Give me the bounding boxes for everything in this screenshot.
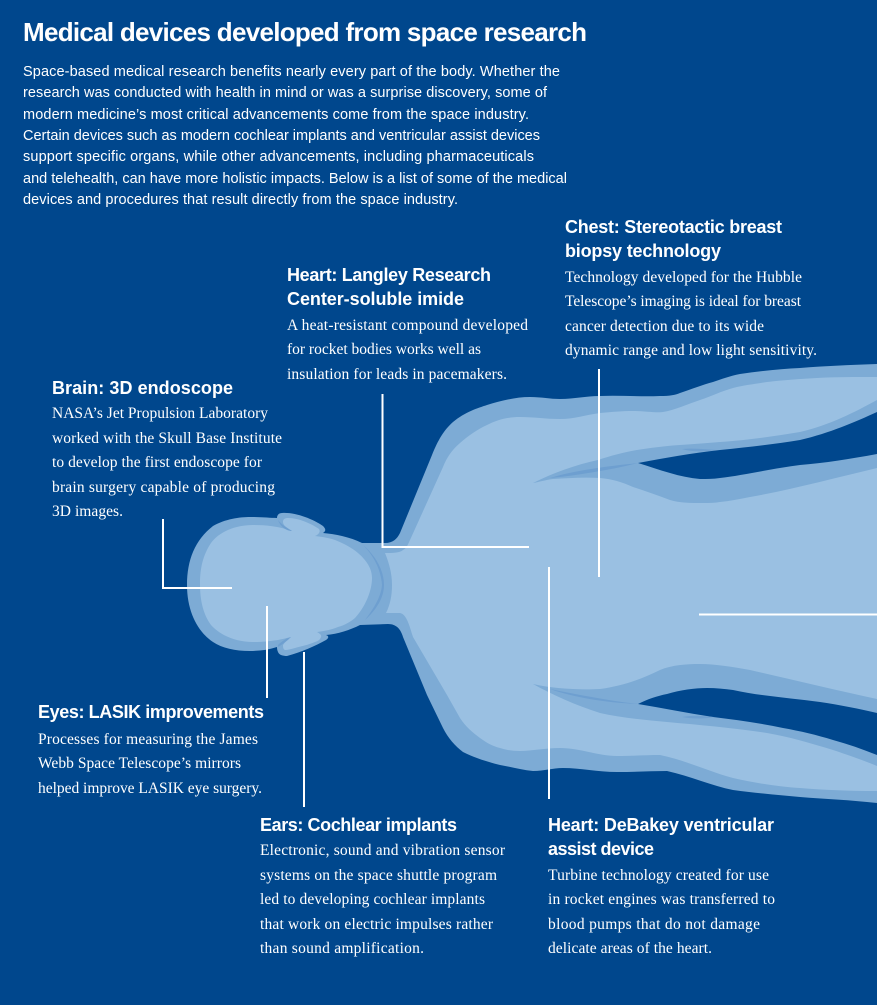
lower arm dark gap — [638, 688, 877, 755]
intro text: research was conducted with health in mind or was a surprise discovery, some of — [23, 85, 548, 101]
leader lines — [163, 369, 877, 807]
callout: heart Langley: Heart: Langley Research — [287, 265, 491, 285]
intro text: Certain devices such as modern cochlear implants and ventricular assist devices — [23, 128, 540, 144]
callout: ears: that work on electric impulses rather — [260, 916, 494, 933]
body inner fill — [385, 377, 877, 791]
callout: eyes: Webb Space Telescope’s mirrors — [38, 755, 241, 772]
leader: brain — [163, 519, 232, 588]
callout: ears: than sound amplification. — [260, 940, 424, 957]
ear crease top — [278, 520, 292, 531]
intro text: and telehealth, can have more holistic impacts. Below is a list of some of the medical — [23, 171, 567, 187]
callout: heart DeBakey: assist device — [548, 839, 654, 859]
callout: eyes: Processes for measuring the James — [38, 731, 258, 748]
callout: ears — [260, 815, 506, 957]
callout: heart DeBakey — [548, 815, 775, 957]
callout: brain: worked with the Skull Base Institute — [52, 430, 282, 447]
callout: ears: led to developing cochlear implants — [260, 891, 485, 908]
lower arm crease — [550, 689, 638, 704]
callout: brain — [52, 378, 282, 520]
leader: heart DeBakey — [548, 567, 550, 799]
leader: chest — [598, 369, 600, 577]
intro text: Space-based medical research benefits nearly every part of the body. Whether the — [23, 64, 560, 80]
band above lower arm — [533, 664, 877, 766]
callout: brain: Brain: 3D endoscope — [52, 378, 233, 398]
callout: eyes: helped improve LASIK eye surgery. — [38, 780, 262, 797]
callout: chest: Technology developed for the Hubble — [565, 269, 802, 286]
body outer silhouette — [187, 364, 877, 803]
callout: chest: Chest: Stereotactic breast — [565, 217, 782, 237]
callout: eyes — [38, 702, 264, 797]
callout: heart DeBakey: Heart: DeBakey ventricular — [548, 815, 774, 835]
callout: heart DeBakey: delicate areas of the heart. — [548, 940, 712, 957]
title: Medical devices developed from space research — [23, 17, 587, 47]
band under upper arm — [533, 400, 877, 503]
intro text: modern medicine’s most critical advancements come from the space industry. — [23, 107, 529, 123]
callout: chest: cancer detection due to its wide — [565, 318, 764, 335]
callout: heart DeBakey: in rocket engines was transferred to — [548, 891, 775, 908]
upper arm crease — [550, 463, 638, 478]
head inner fill — [200, 518, 372, 650]
callout: ears: Electronic, sound and vibration sensor — [260, 842, 506, 859]
ear crease bottom — [278, 637, 291, 647]
intro text: devices and procedures that result directly from the space industry. — [23, 192, 458, 208]
leader: eyes — [266, 606, 268, 698]
callout: brain: 3D images. — [52, 503, 123, 520]
callout: brain: brain surgery capable of producing — [52, 479, 275, 496]
callout: heart Langley: for rocket bodies works well as — [287, 341, 481, 358]
body illustration — [187, 364, 877, 803]
callout: heart Langley — [287, 265, 528, 383]
callout: chest — [565, 217, 817, 359]
neck crease — [363, 545, 384, 620]
callout: brain: to develop the first endoscope for — [52, 454, 263, 471]
callout: ears: Ears: Cochlear implants — [260, 815, 457, 835]
callout: chest: Telescope’s imaging is ideal for breast — [565, 293, 802, 310]
lower arm small crease — [682, 716, 714, 718]
intro text: support specific organs, while other advancements, including pharmaceuticals — [23, 149, 534, 165]
callout: heart Langley: Center-soluble imide — [287, 289, 464, 309]
callout: eyes: Eyes: LASIK improvements — [38, 702, 264, 722]
leader: heart Langley — [382, 394, 529, 547]
callout: heart DeBakey: Turbine technology created for use — [548, 867, 769, 884]
callout: ears: systems on the space shuttle program — [260, 867, 497, 884]
leader: right torso — [699, 614, 877, 616]
intro text — [23, 64, 567, 208]
leader: ears — [303, 652, 305, 807]
callout: chest: dynamic range and low light sensitivity. — [565, 342, 817, 359]
callout: brain: NASA’s Jet Propulsion Laboratory — [52, 405, 268, 422]
callout: heart Langley: A heat-resistant compound developed — [287, 317, 528, 334]
upper arm dark gap — [638, 412, 877, 479]
callout: heart Langley: insulation for leads in pacemakers. — [287, 366, 507, 383]
upper arm small crease — [682, 449, 716, 451]
callout: heart DeBakey: blood pumps that do not damage — [548, 916, 760, 933]
callout: chest: biopsy technology — [565, 241, 721, 261]
